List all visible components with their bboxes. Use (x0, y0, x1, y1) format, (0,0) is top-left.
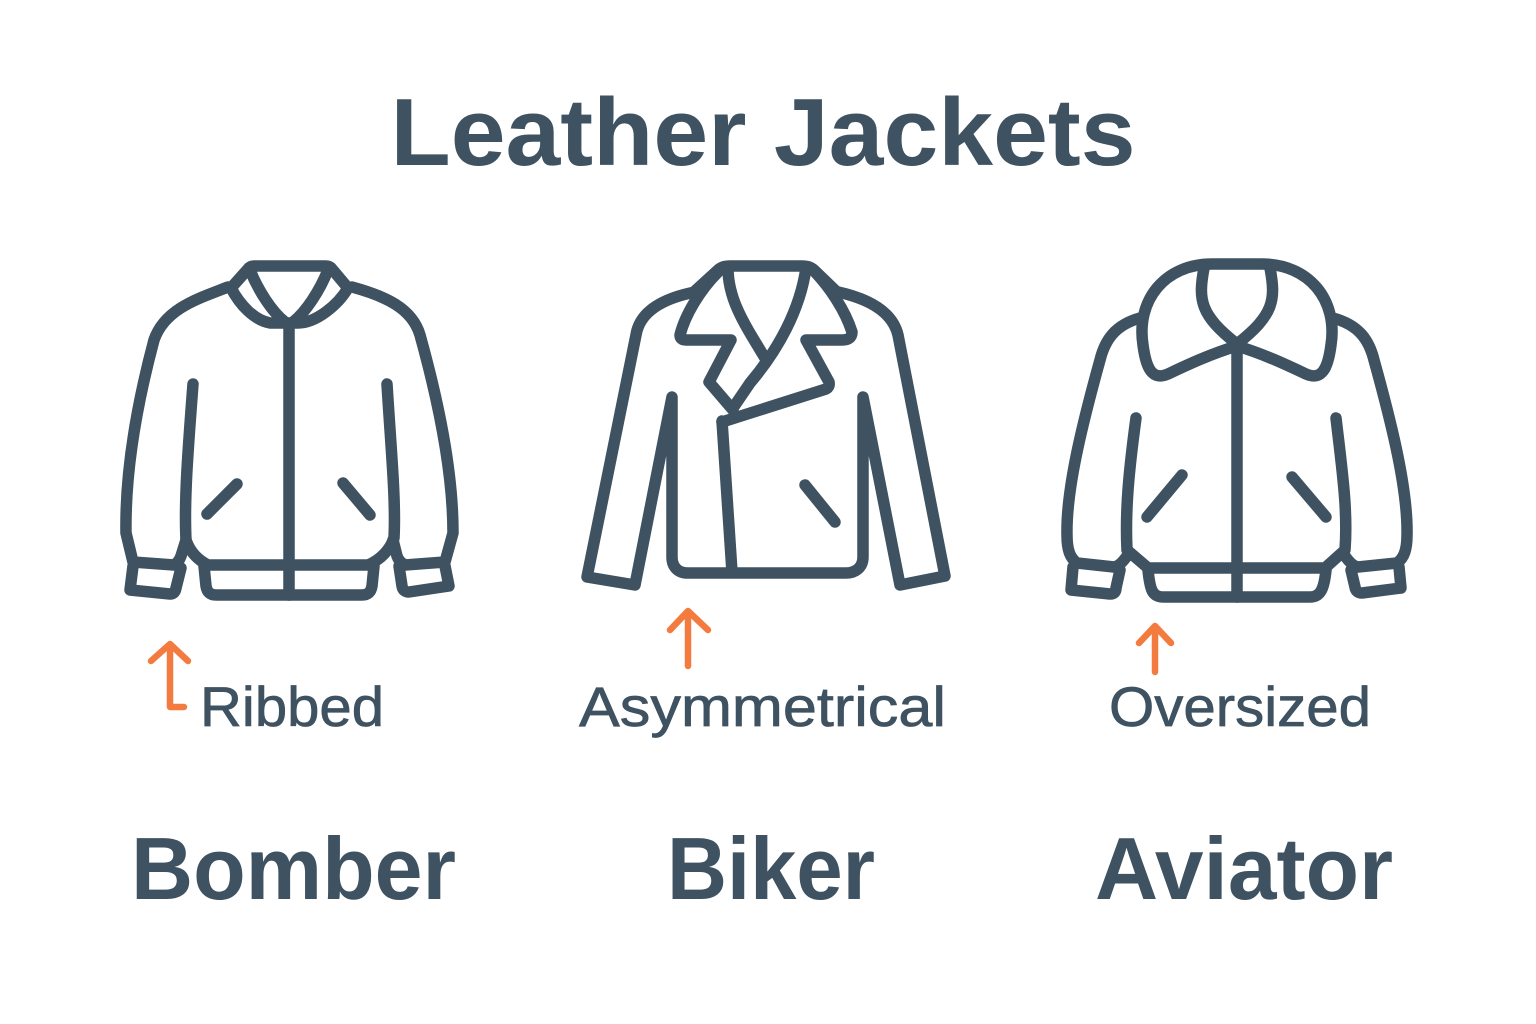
icon: aviator jacket (1067, 264, 1407, 597)
arrow: ribbed (151, 644, 188, 707)
label: oversized: Oversized (1109, 675, 1371, 738)
heading: bomber: Bomber (131, 819, 456, 918)
heading: aviator: Aviator (1095, 819, 1393, 918)
heading: biker: Biker (667, 819, 875, 918)
arrow: oversized (1139, 626, 1171, 672)
title: Leather Jackets (390, 79, 1136, 186)
label: ribbed: Ribbed (200, 675, 384, 738)
arrow: asymmetrical (670, 611, 708, 666)
icon: bomber jacket (126, 266, 453, 595)
label: asymmetrical: Asymmetrical (579, 675, 946, 738)
icon: biker jacket (587, 266, 945, 585)
